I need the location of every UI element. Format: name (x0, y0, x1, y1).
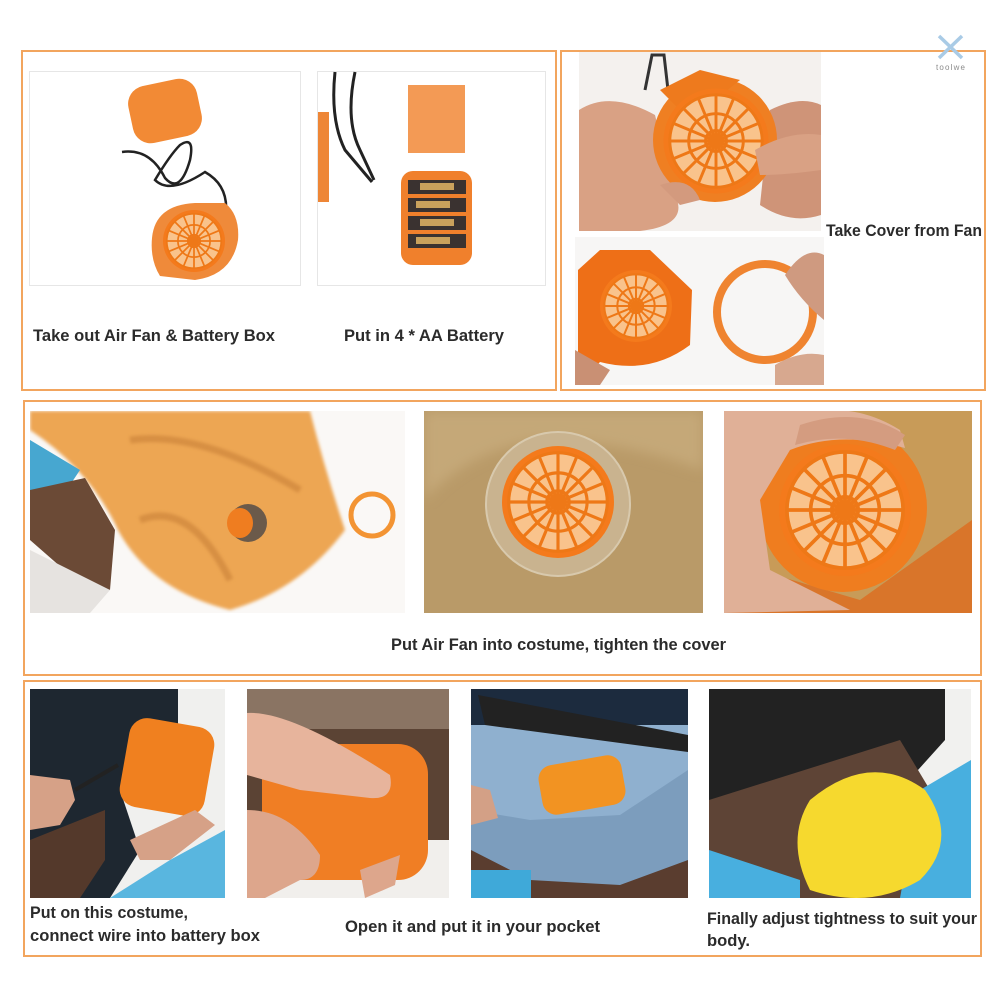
photo: connecting wire (30, 689, 225, 898)
photo: hands holding fan (579, 52, 821, 231)
panel: unpack and insert batteries (22, 51, 556, 390)
caption: pocket: Open it and put it in your pocket (345, 917, 600, 936)
panel: take cover from fan (561, 51, 985, 390)
caption: adjust tightness: body. (707, 931, 750, 950)
caption: put on costume: Put on this costume, (30, 903, 188, 922)
caption: adjust tightness (707, 909, 977, 950)
watermark logo (936, 36, 966, 72)
caption: adjust tightness: Finally adjust tightness to suit your (707, 909, 977, 928)
photo: air fan and battery box (30, 72, 300, 286)
caption: put on costume (30, 903, 261, 945)
caption: take cover: Take Cover from Fan (826, 221, 982, 240)
photo: battery compartment (318, 72, 546, 286)
panel: connect and wear (24, 681, 981, 956)
watermark logo: toolwe (936, 63, 966, 72)
caption: take out fan: Take out Air Fan & Battery Box (33, 326, 276, 345)
photo: costume with hole and ring (30, 411, 405, 613)
caption: put fan in: Put Air Fan into costume, tighten the cover (391, 635, 726, 654)
panel: put fan into costume (24, 401, 981, 675)
caption: put on costume: connect wire into battery box (30, 926, 261, 945)
photo: opening the box (247, 689, 449, 898)
photo: fan fitted in fabric (424, 411, 703, 613)
photo: yellow bag at waist (709, 689, 971, 898)
photo: fan and removed cover ring (575, 237, 824, 385)
caption: batteries: Put in 4 * AA Battery (344, 326, 505, 345)
photo: box in jeans pocket (471, 689, 688, 898)
photo: tightening cover (724, 410, 972, 613)
